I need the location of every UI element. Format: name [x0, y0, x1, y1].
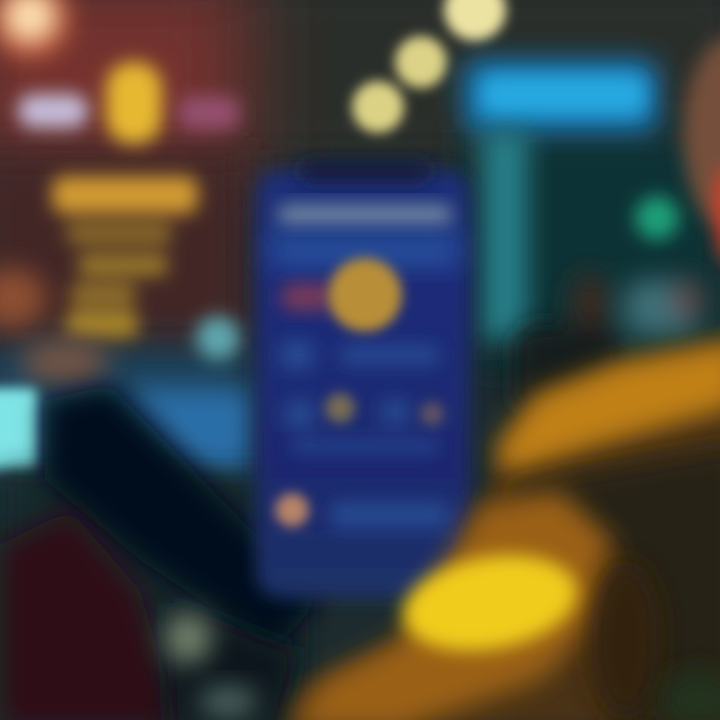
- left-side hand and cyan panels: [0, 268, 250, 490]
- glowing yellow fingertip: [395, 542, 585, 664]
- blue neon sign: [462, 58, 660, 134]
- yellow sign: [106, 62, 162, 144]
- phone body: [256, 170, 470, 598]
- phone blue band: [270, 235, 460, 267]
- phone rows: [280, 340, 450, 528]
- dark laptop diagonal: [0, 385, 320, 720]
- phone heading: [278, 204, 452, 226]
- top-left orange light: [0, 0, 68, 56]
- yellow string lights: [352, 0, 506, 133]
- white sign: [18, 94, 88, 128]
- phone red accent: [282, 284, 332, 310]
- green light: [635, 196, 679, 240]
- phone small icons: [325, 393, 355, 423]
- orange sleeve and hand: [285, 335, 720, 720]
- person's head at right edge: [683, 35, 720, 263]
- background people: [515, 272, 704, 415]
- signage lights: [18, 62, 240, 144]
- teal column: [482, 130, 528, 340]
- yellow menu board: [52, 176, 198, 338]
- phone gold coin: [328, 258, 402, 332]
- phone notch: [300, 160, 430, 182]
- pink sign: [178, 96, 240, 130]
- phone: [256, 160, 470, 598]
